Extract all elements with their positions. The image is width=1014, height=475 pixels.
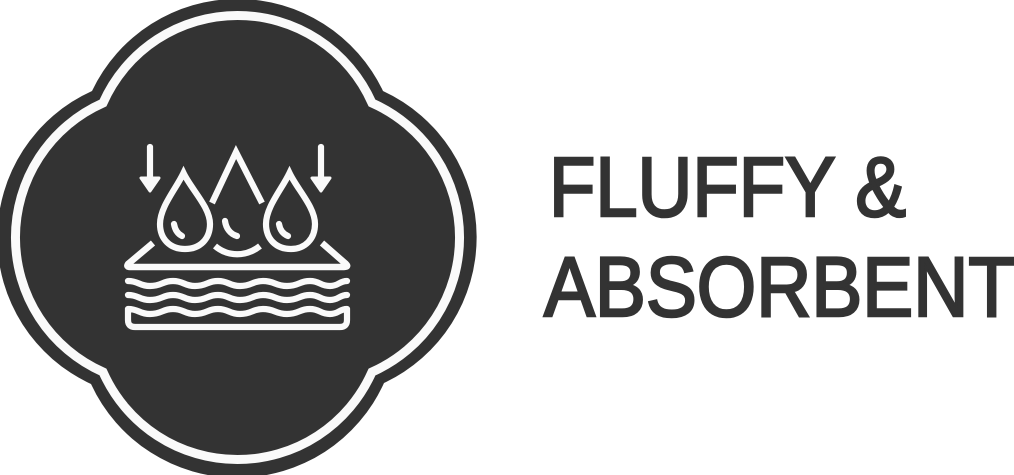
icon: right drop <box>266 173 315 249</box>
icon: bottom tray with wave <box>128 309 347 327</box>
icon: absorbent layers with drops <box>127 147 347 327</box>
icon: top mattress layer <box>127 243 347 267</box>
badge: quatrefoil with icon <box>0 0 477 475</box>
badge outer shape <box>0 0 477 475</box>
icon: left drop <box>160 173 210 249</box>
icon: wave one <box>128 281 347 286</box>
badge inner white ring <box>15 15 460 460</box>
icon: right arrow <box>312 147 330 191</box>
icon: centre drop <box>212 152 262 254</box>
heading line 1: FLUFFY & <box>549 140 906 234</box>
heading: product feature <box>544 140 1014 334</box>
icon: left arrow <box>141 147 159 191</box>
icon: wave two <box>128 295 347 300</box>
